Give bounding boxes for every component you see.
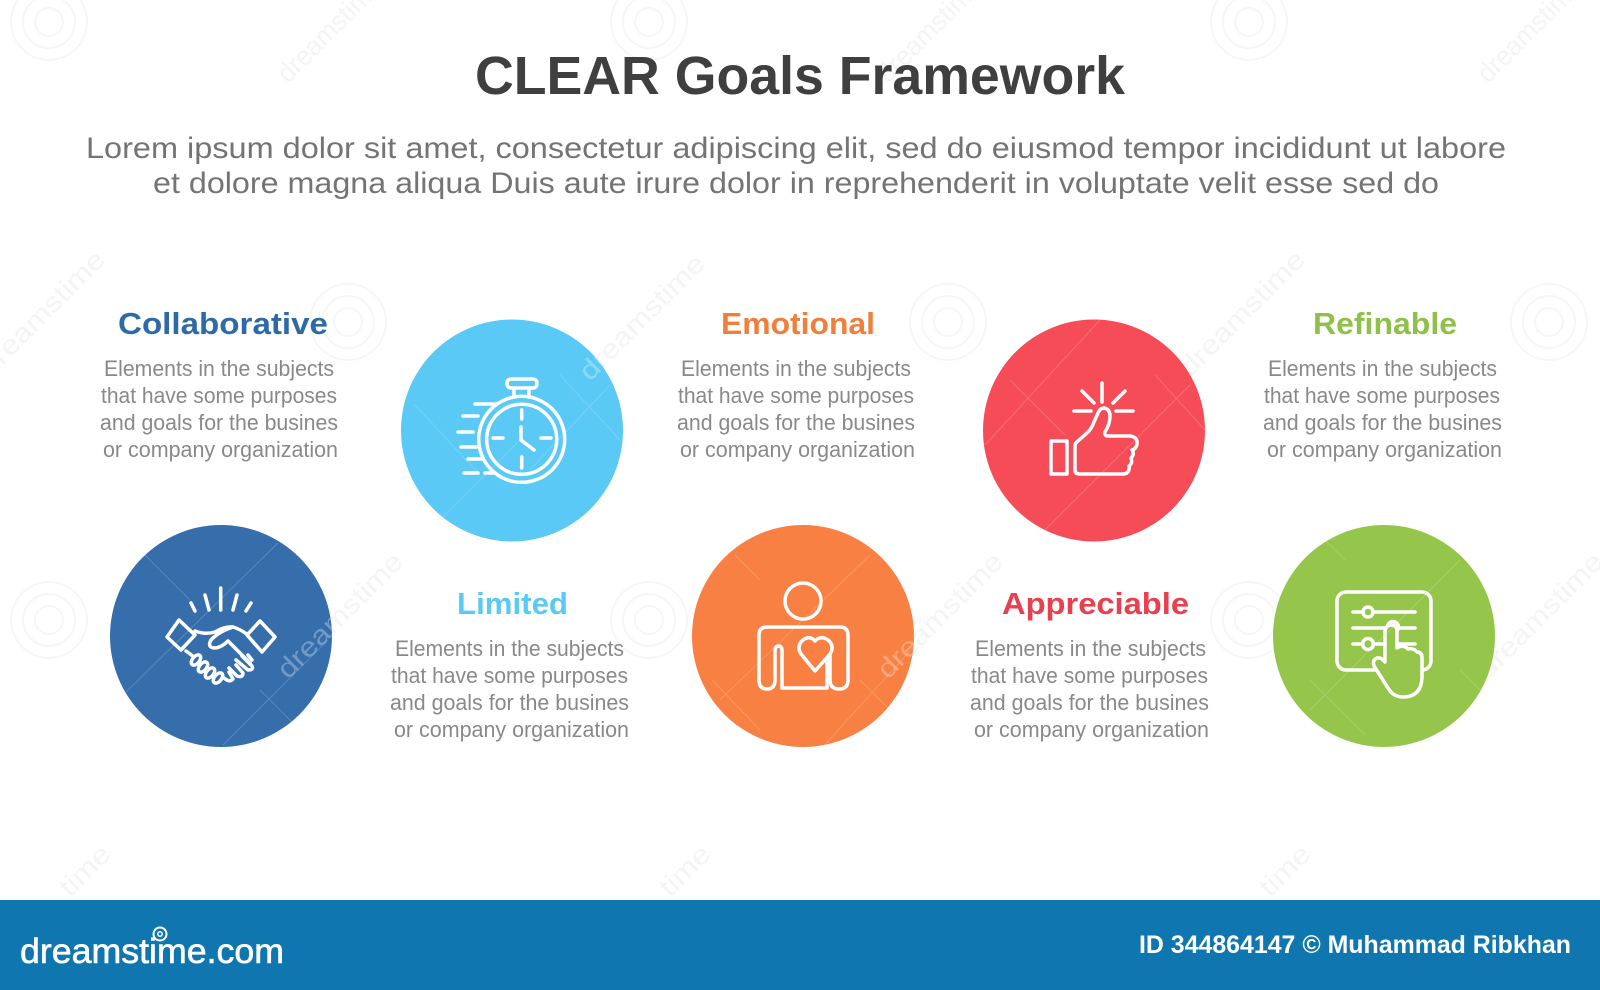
text block: limited: Elements in the subjects: [395, 636, 624, 661]
panel: limited: [390, 320, 628, 742]
circle: limited: [401, 320, 623, 542]
panel: collaborative: [100, 312, 338, 747]
watermark pattern: time: [1253, 839, 1317, 902]
text block: collaborative: that have some purposes: [101, 383, 337, 408]
logo: dreamstime: dreamstime.com: [20, 932, 284, 971]
text block: appreciable: that have some purposes: [971, 663, 1208, 688]
icon: person with heart: [759, 583, 848, 689]
icon: thumbs up: [1051, 383, 1137, 474]
text block: refinable: or company organization: [1267, 437, 1502, 462]
text block: appreciable: and goals for the busines: [970, 690, 1209, 715]
icon: handshake: [167, 588, 275, 685]
icon: sliders and hand: [1337, 592, 1431, 697]
text block: appreciable: Elements in the subjects: [975, 636, 1206, 661]
circle: emotional: [692, 525, 914, 747]
text block: emotional: and goals for the busines: [677, 410, 915, 435]
text block: refinable: [1263, 356, 1502, 462]
watermark pattern: dreamstime: [871, 546, 1009, 684]
circle: appreciable: [983, 320, 1205, 542]
text block: appreciable: or company organization: [974, 717, 1209, 742]
watermark pattern: dreamstime: [1173, 244, 1311, 382]
circle: collaborative: [110, 525, 332, 747]
text block: collaborative: Elements in the subjects: [104, 356, 334, 381]
image credit: ID 344864147 © Muhammad Ribkhan: [1139, 931, 1571, 959]
panel: limited: dreamstime: [573, 248, 711, 386]
heading: emotional: Emotional: [721, 306, 875, 341]
text block: collaborative: or company organization: [103, 437, 338, 462]
watermark pattern: dreamstime: [573, 248, 711, 386]
text block: appreciable: [970, 636, 1209, 742]
heading: collaborative: Collaborative: [118, 306, 328, 341]
subtitle text block: Lorem ipsum dolor sit amet, consectetur adipiscing elit, sed do eiusmod tempor incididunt ut labore: [86, 132, 1506, 165]
text block: refinable: Elements in the subjects: [1268, 356, 1497, 381]
panel: emotional: [678, 312, 914, 747]
circle: refinable: [1273, 525, 1495, 747]
subtitle text block: [86, 132, 1506, 200]
watermark pattern: dreamstime: [271, 546, 409, 684]
text block: refinable: and goals for the busines: [1263, 410, 1502, 435]
icon: stopwatch: [458, 379, 565, 482]
heading: refinable: Refinable: [1313, 306, 1457, 341]
panel: emotional: dreamstime: [871, 546, 1009, 684]
panel: collaborative: dreamstime: [271, 546, 409, 684]
text block: collaborative: and goals for the busines: [100, 410, 338, 435]
text block: limited: [390, 636, 629, 742]
text block: emotional: or company organization: [680, 437, 915, 462]
watermark pattern: dreamstime: [1471, 546, 1600, 684]
panel: appreciable: [970, 320, 1209, 742]
text block: emotional: that have some purposes: [678, 383, 914, 408]
text block: collaborative: [100, 356, 338, 462]
footer banner: [0, 900, 1600, 990]
text block: emotional: [677, 356, 915, 462]
text block: limited: or company organization: [394, 717, 629, 742]
text block: emotional: Elements in the subjects: [681, 356, 911, 381]
text block: refinable: that have some purposes: [1264, 383, 1500, 408]
watermark pattern: time: [653, 839, 717, 902]
watermark pattern: time: [53, 839, 117, 902]
heading: limited: Limited: [457, 586, 568, 621]
heading: appreciable: Appreciable: [1002, 586, 1189, 621]
title: CLEAR Goals Framework: [475, 46, 1126, 106]
text block: limited: that have some purposes: [391, 663, 628, 688]
subtitle text block: et dolore magna aliqua Duis aute irure dolor in reprehenderit in voluptate velit esse sed do: [153, 167, 1439, 200]
text block: limited: and goals for the busines: [390, 690, 629, 715]
panel: refinable: [1263, 306, 1502, 747]
